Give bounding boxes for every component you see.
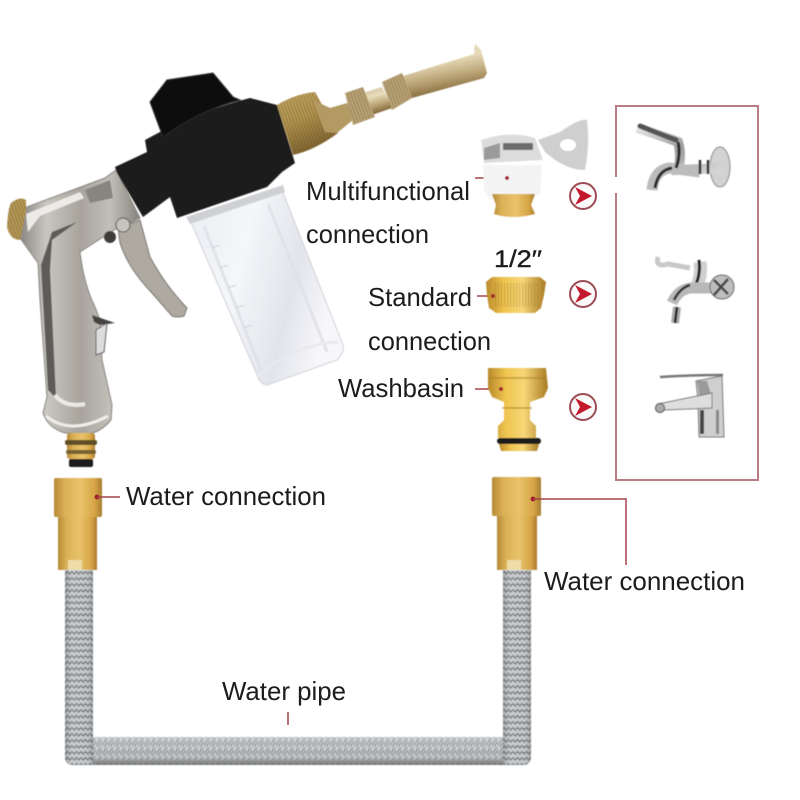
icon: wall faucet 2 <box>657 257 734 323</box>
leader line <box>475 388 501 390</box>
brass nozzle <box>313 44 487 133</box>
water pipe braided hose <box>65 570 531 765</box>
icon: wall faucet 1 <box>637 126 730 190</box>
leader line <box>477 295 493 297</box>
brass nut <box>277 92 338 155</box>
rear brass knob <box>7 199 26 240</box>
icon: basin faucet 3 <box>656 375 724 437</box>
standard brass fitting <box>486 277 546 313</box>
spray gun with foam bottle <box>7 44 487 467</box>
washbasin brass quick connector <box>488 368 548 451</box>
left brass water connector <box>54 478 102 570</box>
label: Water pipe <box>222 678 346 725</box>
arrow icon 3 <box>570 394 596 420</box>
label: Multifunctional connection: Multifunctional <box>306 178 470 206</box>
label: Multifunctional connection: connection <box>306 221 429 249</box>
arrow icon 1 <box>570 183 596 209</box>
leader line with dot <box>531 497 626 565</box>
label: Multifunctional connection <box>306 178 507 249</box>
label: Standard connection: Standard <box>368 284 472 312</box>
gun bottom quick connector <box>65 433 97 467</box>
label: Washbasin: Washbasin <box>338 375 464 403</box>
gun trigger <box>118 220 187 317</box>
label: Water pipe: Water pipe <box>222 678 346 706</box>
leader line <box>475 177 507 179</box>
leader tick <box>287 712 289 725</box>
black mixing head <box>115 98 295 218</box>
right brass water connector <box>492 477 541 570</box>
label: Standard connection: connection <box>368 328 491 356</box>
label: right Water connection: Water connection <box>544 568 745 596</box>
label: 1/2 inch: 1/2′′ <box>494 246 543 273</box>
multifunctional connector with key <box>481 120 588 217</box>
black cap <box>150 73 240 137</box>
gun body <box>20 170 140 434</box>
label: right Water connection <box>531 497 745 596</box>
foam bottle <box>186 185 343 385</box>
leader line with dot <box>95 495 120 499</box>
label: Standard connection <box>368 284 493 356</box>
arrow icon 2 <box>570 281 596 307</box>
panel: compatible faucets frame <box>616 106 758 480</box>
label: left Water connection: Water connection <box>126 483 326 511</box>
